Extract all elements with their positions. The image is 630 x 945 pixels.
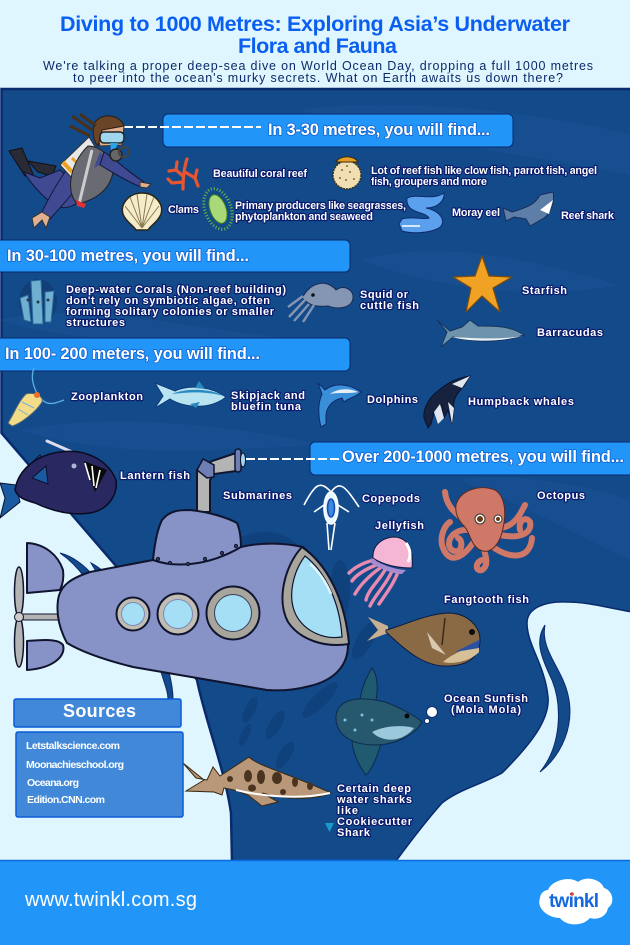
label: cookiecutter shark: water sharks bbox=[336, 794, 412, 806]
heading bar: 30-100 metres bbox=[0, 240, 350, 272]
icon: hull bbox=[57, 544, 348, 690]
icon: humpback whale bbox=[424, 376, 470, 428]
heading bar: 100-200 meters: In 100- 200 meters, you will find... bbox=[5, 345, 260, 363]
heading bar: 200-1000 metres bbox=[310, 442, 630, 475]
icon: lantern fish bbox=[0, 441, 116, 518]
icon: octopus bbox=[442, 488, 532, 570]
label: cookiecutter shark: Shark bbox=[337, 827, 371, 839]
label: reef fish: fish, groupers and more bbox=[371, 176, 487, 188]
icon: fangtooth fish bbox=[367, 613, 480, 666]
dashed line from diver bbox=[124, 126, 261, 128]
sources heading bbox=[14, 699, 181, 727]
icon: porthole medium bbox=[158, 594, 198, 634]
water wave patterns bbox=[0, 105, 630, 560]
label: deep-water corals: forming solitary colonies or smaller bbox=[66, 306, 275, 318]
label: deep-water corals: don't rely on symbiotic algae, often bbox=[66, 295, 270, 307]
footer url: www.twinkl.com.sg bbox=[24, 889, 197, 911]
title bbox=[60, 12, 571, 58]
label: reef fish bbox=[371, 165, 597, 188]
light shape: right seabed bbox=[396, 602, 630, 861]
icon: squid bbox=[288, 283, 353, 322]
label: humpback whales: Humpback whales bbox=[468, 396, 574, 408]
label: lantern fish: Lantern fish bbox=[120, 470, 190, 482]
icon: porthole large bbox=[206, 586, 260, 640]
label: squid bbox=[360, 289, 419, 312]
sources list: Letstalkscience.com bbox=[26, 740, 120, 752]
label: jellyfish: Jellyfish bbox=[375, 520, 424, 532]
intro text: to peer into the ocean's murky secrets. What on Earth awaits us down there? bbox=[73, 71, 563, 85]
right swoosh bbox=[540, 625, 570, 772]
title: Diving to 1000 Metres: Exploring Asia’s Underwater bbox=[60, 12, 571, 36]
icon: reef shark bbox=[503, 192, 554, 226]
label: primary producers bbox=[235, 200, 406, 223]
label: deep-water corals: structures bbox=[66, 317, 125, 329]
label: primary producers: phytoplankton and seaweed bbox=[235, 211, 373, 223]
sources list: Edition.CNN.com bbox=[27, 794, 105, 806]
label: coral reef: Beautiful coral reef bbox=[213, 168, 307, 180]
background fish silhouettes bbox=[225, 532, 383, 771]
icon: green phytoplankton bbox=[199, 185, 237, 233]
heading bar: 30-100 metres: In 30-100 metres, you will find... bbox=[7, 247, 249, 265]
icon: moray eel bbox=[399, 193, 444, 233]
icon: propeller and fins bbox=[14, 543, 63, 670]
label: reef shark: Reef shark bbox=[561, 210, 615, 222]
intro text: We're talking a proper deep-sea dive on World Ocean Day, dropping a full 1000 metres bbox=[43, 59, 593, 73]
label: submarines: Submarines bbox=[223, 490, 292, 502]
label: squid: cuttle fish bbox=[360, 300, 419, 312]
title: Flora and Fauna bbox=[238, 34, 398, 58]
icon: conning tower bbox=[153, 510, 241, 567]
icon: barracuda bbox=[437, 320, 524, 347]
label: primary producers: Primary producers like seagrasses, bbox=[235, 200, 406, 212]
icon: small triangle bbox=[325, 823, 334, 832]
label: dolphins: Dolphins bbox=[367, 394, 418, 406]
icon: tuna bbox=[155, 381, 226, 408]
icon: bubbles bbox=[424, 706, 438, 724]
icon: periscope bbox=[197, 449, 246, 512]
sources list: Moonachieschool.org bbox=[26, 759, 124, 771]
icon: ocean sunfish bbox=[336, 668, 422, 775]
logo: twinkl: twinkl bbox=[549, 891, 599, 912]
label: tuna bbox=[231, 390, 305, 413]
label: squid: Squid or bbox=[360, 289, 409, 301]
sources list: Oceana.org bbox=[27, 777, 79, 789]
icon: deep-water corals bbox=[19, 279, 57, 325]
label: ocean sunfish: Ocean Sunfish bbox=[444, 693, 528, 705]
label: ocean sunfish bbox=[444, 693, 528, 716]
icon: zooplankton bbox=[8, 368, 64, 426]
label: cookiecutter shark: like bbox=[337, 805, 358, 817]
footer band bbox=[0, 860, 630, 945]
icon: diver bbox=[9, 114, 151, 228]
icon: jellyfish bbox=[349, 537, 412, 606]
icon: leopard shark bbox=[183, 757, 331, 806]
icon: dolphin bbox=[318, 383, 361, 427]
label: barracudas: Barracudas bbox=[537, 327, 603, 339]
heading bar: 3-30 metres bbox=[163, 114, 513, 147]
intro text bbox=[43, 59, 593, 85]
icon: clam shell bbox=[122, 193, 162, 230]
label: clams: Clams bbox=[168, 204, 199, 216]
label: cookiecutter shark bbox=[336, 783, 413, 839]
label: deep-water corals bbox=[66, 284, 286, 329]
heading bar: 200-1000 metres: Over 200-1000 metres, you will find... bbox=[342, 448, 624, 466]
label: moray eel: Moray eel bbox=[452, 207, 500, 219]
sources heading: Sources bbox=[63, 701, 136, 721]
label: tuna: bluefin tuna bbox=[231, 401, 302, 413]
label: zooplankton: Zooplankton bbox=[71, 391, 143, 403]
heading bar: 3-30 metres: In 3-30 metres, you will find... bbox=[268, 121, 490, 139]
sources list bbox=[16, 732, 183, 817]
icon: porthole small bbox=[116, 598, 150, 630]
icon: copepod bbox=[304, 485, 359, 550]
label: fangtooth fish: Fangtooth fish bbox=[444, 594, 529, 606]
label: ocean sunfish: (Mola Mola) bbox=[451, 704, 521, 716]
label: octopus: Octopus bbox=[537, 490, 585, 502]
label: deep-water corals: Deep-water Corals (Non-reef building) bbox=[66, 284, 286, 296]
icon: puffer fish bbox=[333, 157, 361, 189]
left swooshes bbox=[60, 553, 173, 699]
submarine bbox=[14, 449, 349, 690]
logo: twinkl bbox=[539, 879, 612, 924]
icon: hull rivets bbox=[156, 544, 238, 566]
label: starfish: Starfish bbox=[522, 285, 567, 297]
icon: coral bbox=[168, 159, 198, 189]
label: copepods: Copepods bbox=[362, 493, 420, 505]
label: tuna: Skipjack and bbox=[231, 390, 305, 402]
label: cookiecutter shark: Certain deep bbox=[337, 783, 411, 795]
label: reef fish: Lot of reef fish like clow fish, parrot fish, angel bbox=[371, 165, 597, 177]
dashed line from periscope bbox=[246, 458, 339, 460]
heading bar: 100-200 meters bbox=[0, 338, 350, 371]
icon: starfish bbox=[453, 256, 512, 312]
label: cookiecutter shark: Cookiecutter bbox=[337, 816, 413, 828]
icon: front window bbox=[283, 547, 349, 645]
